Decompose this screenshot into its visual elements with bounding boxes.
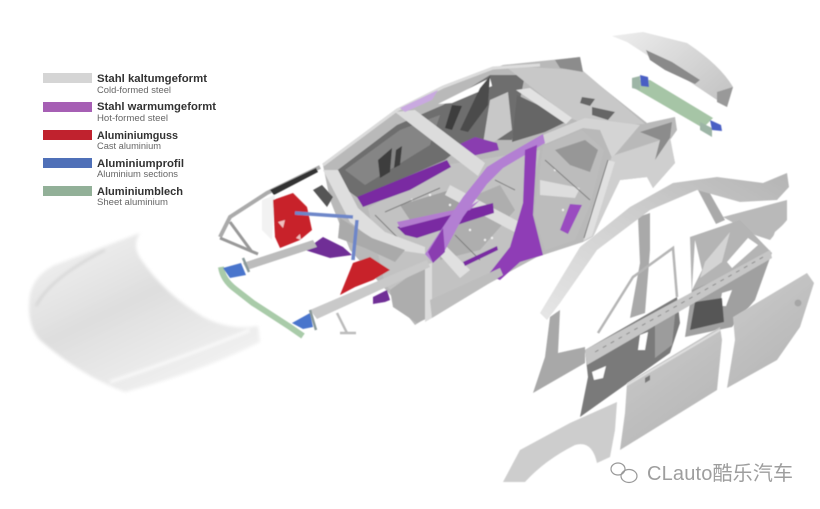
legend: aluminium sections: [43, 158, 184, 179]
legend: sheet aluminium: Aluminiumblech: [97, 186, 183, 198]
front radiator frame: [220, 167, 320, 237]
rear door: [727, 273, 814, 388]
rear door lower: [685, 258, 770, 337]
A pillar lower: [533, 310, 585, 393]
roof rail purple section: [400, 90, 438, 112]
front door: [620, 327, 722, 450]
floor: [368, 150, 540, 318]
strut tower left, red: [273, 193, 312, 248]
legend: cold-formed steel: Stahl kaltumgeformt: [97, 73, 207, 85]
watermark text: CLauto酷乐汽车: [647, 462, 793, 485]
legend: sheet aluminium: Sheet aluminium: [97, 197, 168, 207]
rear purple panel: [560, 204, 582, 234]
legend: aluminium sections: Aluminiumprofil: [97, 158, 184, 170]
strut tower right, red: [340, 257, 390, 295]
icon: wechat bubbles: [611, 463, 637, 482]
bumper beam, sheet aluminium: [221, 267, 303, 336]
trunk lid: [612, 32, 733, 107]
rear window opening: [512, 95, 570, 142]
rear door opening: [534, 130, 604, 250]
legend: cast aluminium: [43, 130, 178, 151]
front door frame: [598, 248, 677, 333]
far side wall: [335, 75, 525, 198]
sill band: [585, 250, 772, 365]
C pillar light band: [584, 160, 615, 240]
roof arc: [540, 173, 789, 320]
far door opening: [378, 105, 462, 178]
front door inner: [580, 297, 680, 417]
rear quarter: [723, 200, 787, 240]
B pillar: [630, 213, 650, 318]
rear bumper beam: [632, 75, 722, 137]
legend: hot-formed steel: Hot-formed steel: [97, 113, 168, 123]
legend: cold-formed steel: [43, 73, 207, 95]
legend: cast aluminium: Aluminiumguss: [97, 130, 178, 142]
rear roof crossbar: [516, 88, 572, 124]
legend: sheet aluminium: [43, 186, 183, 207]
aluminium strut bars: [295, 213, 357, 260]
legend: [43, 73, 216, 207]
legend: cold-formed steel: Cold-formed steel: [97, 85, 171, 95]
body silhouette: [323, 57, 677, 325]
floor detail: [411, 169, 564, 241]
right front rail: [310, 260, 430, 319]
left front rail: [243, 240, 317, 270]
front crash box right: [292, 313, 313, 329]
far B pillar strut: [460, 76, 490, 132]
windscreen header: [395, 110, 485, 176]
sill: [430, 268, 503, 318]
rear crash boxes: [640, 75, 722, 131]
hood panel: [29, 233, 260, 392]
engine bay mid section: [338, 218, 405, 262]
windscreen gap: [438, 78, 492, 104]
side panel frame: [533, 173, 789, 417]
front fender: [503, 402, 617, 482]
cowl band: [323, 170, 425, 254]
parcel shelf: [505, 66, 645, 126]
rear wheel arch: [583, 137, 675, 242]
front crash box left: [223, 263, 246, 278]
watermark: [611, 462, 793, 485]
car body shell: [220, 57, 677, 336]
front bulkhead block: [390, 263, 430, 323]
roof rail: [323, 65, 540, 165]
rail mounts: [243, 258, 316, 330]
legend: aluminium sections: Aluminium sections: [97, 169, 179, 179]
legend: hot-formed steel: [43, 101, 216, 123]
near side roof purple: [425, 134, 545, 263]
C pillar ring: [543, 118, 640, 158]
C pillar struts: [698, 190, 725, 224]
floor bar purple: [463, 246, 498, 266]
strut leg: [337, 313, 356, 333]
far rocker band purple: [357, 160, 451, 207]
B pillar purple: [488, 145, 543, 280]
middle seat bar purple: [397, 203, 494, 238]
A pillar base darker: [428, 228, 445, 263]
lower engine purple: [305, 237, 352, 258]
legend: hot-formed steel: Stahl warmumgeformt: [97, 101, 216, 113]
far seat bar purple: [460, 137, 499, 156]
rear door window frame: [690, 220, 772, 300]
legend: cast aluminium: Cast aluminium: [97, 141, 161, 151]
